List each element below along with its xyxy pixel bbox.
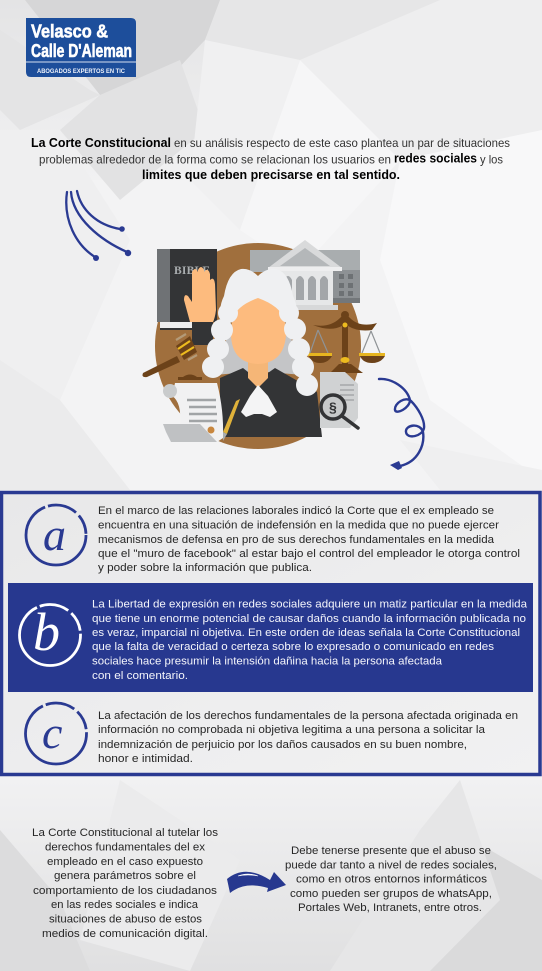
text: bottom left paragraph: genera parámetros sobre el <box>54 870 196 882</box>
text: bottom left paragraph: comportamiento de los ciudadanos <box>33 885 218 897</box>
intro text: en su análisis respecto de este caso plantea un par de situaciones <box>174 136 510 150</box>
intro text: redes sociales <box>394 152 477 166</box>
text: bottom left paragraph: situaciones de abuso de estos <box>49 914 203 926</box>
icon: courthouse <box>250 240 360 310</box>
text a: encuentra en una situación de indefensión en la medida que no puede ejercer <box>98 520 499 532</box>
icon: bible <box>157 249 217 330</box>
text b <box>92 598 528 682</box>
text c: indemnización de perjuicio por los daños causados en su buen nombre, <box>98 739 467 751</box>
text a <box>98 505 520 574</box>
text c: información no comprobada ni objetiva legitima a una persona a solicitar la <box>98 724 486 736</box>
icon: circled c <box>26 703 86 764</box>
icon: wig curls <box>202 269 318 396</box>
logo: Velasco & Calle D'Aleman: Velasco & <box>31 22 108 42</box>
icon: face <box>231 290 286 364</box>
icon: document and magnifier: § <box>329 399 337 415</box>
icon: circled b: b <box>33 602 60 662</box>
text b: sociales hace presumir la intensión dañina hacia la persona afectada <box>92 656 443 668</box>
text: bottom left paragraph: derechos fundamentales del ex <box>45 842 206 854</box>
text: bottom right paragraph: como pueden ser grupos de whatsApp, <box>290 888 492 900</box>
text: bottom left paragraph: empleado en el caso expuesto <box>47 856 203 868</box>
text: bottom right paragraph: Portales Web, Intranets, entre otros. <box>298 902 482 914</box>
icon: paper scroll <box>163 383 223 442</box>
icon: circled c: c <box>42 707 62 758</box>
text: bottom left paragraph <box>32 827 219 940</box>
logo: Velasco & Calle D'Aleman: ABOGADOS EXPERTOS EN TIC <box>37 69 126 75</box>
icon: pen <box>223 399 240 441</box>
text c <box>98 710 518 765</box>
text c: honor e intimidad. <box>98 753 193 765</box>
intro text: limites que deben precisarse en tal sentido. <box>142 168 400 182</box>
logo: Velasco & Calle D'Aleman: Calle D'Aleman <box>31 41 132 61</box>
icon: gavel <box>142 334 202 380</box>
icon: bible: BIBLE <box>174 265 210 277</box>
item b: blue band <box>8 583 533 692</box>
brown circle backdrop <box>155 243 361 449</box>
panel: three legal points <box>2 492 540 774</box>
intro text: La Corte Constitucional <box>31 136 171 150</box>
text b: con el comentario. <box>92 670 188 682</box>
intro text: y los <box>480 152 503 166</box>
text: bottom left paragraph: en las redes sociales e indica <box>51 899 199 911</box>
text: bottom right paragraph: como en otros entornos informáticos <box>296 874 488 886</box>
text b: es veraz, imparcial ni objetiva. En este orden de ideas señala la Corte Constitucional <box>92 627 520 639</box>
intro text <box>31 136 510 182</box>
text: bottom right paragraph: puede dar tanto a nivel de redes sociales, <box>285 860 497 872</box>
icon: spiral arrow <box>379 379 424 470</box>
text: bottom right paragraph: Debe tenerse presente que el abuso se <box>291 845 491 857</box>
text a: que el "muro de facebook" al estar bajo el control del empleador le otorga control <box>98 548 520 560</box>
item c <box>26 703 518 765</box>
text: bottom left paragraph: medios de comunicación digital. <box>42 928 208 940</box>
icon: judge robe <box>220 355 322 437</box>
text a: mecanismos de defensa en pro de sus derechos fundamentales en la medida <box>98 534 495 546</box>
text: bottom left paragraph: La Corte Constitucional al tutelar los <box>32 827 219 839</box>
arrow: bottom swoosh <box>227 872 286 893</box>
text a: En el marco de las relaciones laborales indicó la Corte que el ex empleado se <box>98 505 494 517</box>
icon: circled a <box>26 505 86 565</box>
text: bottom right paragraph <box>285 845 497 914</box>
icon: white collar <box>241 385 277 417</box>
icon: circled a: a <box>43 509 66 560</box>
icon: wig back hair <box>214 335 303 375</box>
text b: La Libertad de expresión en redes sociales adquiere un matiz particular en la medida <box>92 598 528 610</box>
icon: circled b <box>20 602 80 666</box>
icon: three curved arrows <box>66 191 131 261</box>
text a: y poder sobre la información que publica. <box>98 562 312 574</box>
illustration: judge with law symbols <box>142 240 385 449</box>
icon: scales of justice <box>308 311 385 373</box>
text b: que tiene un enorme potencial de causar daños cuando la información publicada no <box>92 613 526 625</box>
icon: raised hand <box>184 267 216 345</box>
text b: que la falta de veracidad o certeza sobre lo expresado o comunicado en redes <box>92 641 495 653</box>
item a <box>26 505 520 574</box>
intro text: problemas alrededor de la forma como se relacionan los usuarios en <box>39 152 391 166</box>
icon: document and magnifier <box>320 372 358 428</box>
text c: La afectación de los derechos fundamentales de la persona afectada originada en <box>98 710 518 722</box>
logo: Velasco & Calle D'Aleman <box>26 18 136 77</box>
